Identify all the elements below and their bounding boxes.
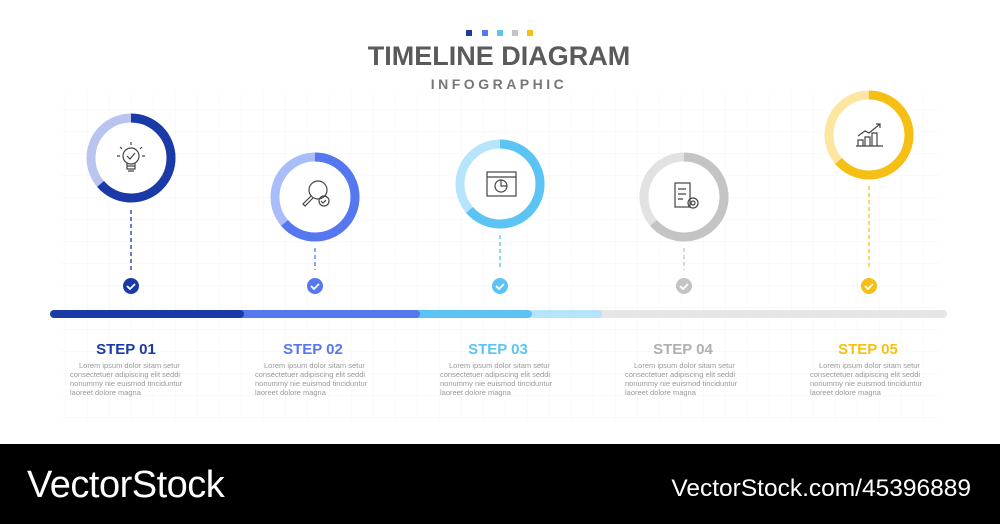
step 2 circle bbox=[275, 157, 355, 237]
step texts: Lorem ipsum dolor sitam setur bbox=[449, 361, 550, 370]
step 3 circle bbox=[460, 144, 540, 224]
footer band: VectorStock.com/45396889 bbox=[671, 475, 971, 502]
icon: magnifier bbox=[303, 181, 329, 206]
footer band: VectorStock bbox=[27, 464, 226, 506]
step texts: laoreet dolore magna bbox=[255, 388, 327, 397]
dashed connectors bbox=[131, 186, 869, 270]
step texts: nonummy nie euismod tinciduntur bbox=[810, 379, 923, 388]
step texts: consectetuer adipiscing elit seddi bbox=[810, 370, 920, 379]
step texts: laoreet dolore magna bbox=[70, 388, 142, 397]
step texts: Lorem ipsum dolor sitam setur bbox=[264, 361, 365, 370]
step texts: Lorem ipsum dolor sitam setur bbox=[634, 361, 735, 370]
step texts bbox=[70, 341, 923, 397]
step texts: Lorem ipsum dolor sitam setur bbox=[819, 361, 920, 370]
step 5 circle bbox=[829, 95, 909, 175]
step texts: STEP 05 bbox=[838, 341, 898, 358]
subtitle: INFOGRAPHIC bbox=[431, 76, 567, 92]
step texts: nonummy nie euismod tinciduntur bbox=[440, 379, 553, 388]
step texts: consectetuer adipiscing elit seddi bbox=[255, 370, 365, 379]
step texts: consectetuer adipiscing elit seddi bbox=[70, 370, 180, 379]
check markers bbox=[123, 278, 877, 294]
step texts: consectetuer adipiscing elit seddi bbox=[440, 370, 550, 379]
step texts: nonummy nie euismod tinciduntur bbox=[625, 379, 738, 388]
step texts: consectetuer adipiscing elit seddi bbox=[625, 370, 735, 379]
title: TIMELINE DIAGRAM bbox=[368, 41, 630, 71]
icon: chart window bbox=[487, 172, 516, 196]
icon: light bulb bbox=[117, 142, 145, 171]
step texts: nonummy nie euismod tinciduntur bbox=[70, 379, 183, 388]
step texts: STEP 02 bbox=[283, 341, 343, 358]
color squares bbox=[466, 30, 533, 36]
step texts: laoreet dolore magna bbox=[440, 388, 512, 397]
step texts: STEP 03 bbox=[468, 341, 528, 358]
step 1 circle bbox=[91, 118, 171, 198]
footer band bbox=[0, 444, 1000, 524]
step texts: laoreet dolore magna bbox=[625, 388, 697, 397]
step texts: nonummy nie euismod tinciduntur bbox=[255, 379, 368, 388]
timeline bar bbox=[50, 310, 947, 318]
icon: checklist target bbox=[675, 183, 698, 208]
icon: growth chart bbox=[856, 124, 883, 146]
step texts: STEP 01 bbox=[96, 341, 156, 358]
step texts: Lorem ipsum dolor sitam setur bbox=[79, 361, 180, 370]
step 4 circle bbox=[644, 157, 724, 237]
step texts: STEP 04 bbox=[653, 341, 714, 358]
step texts: laoreet dolore magna bbox=[810, 388, 882, 397]
